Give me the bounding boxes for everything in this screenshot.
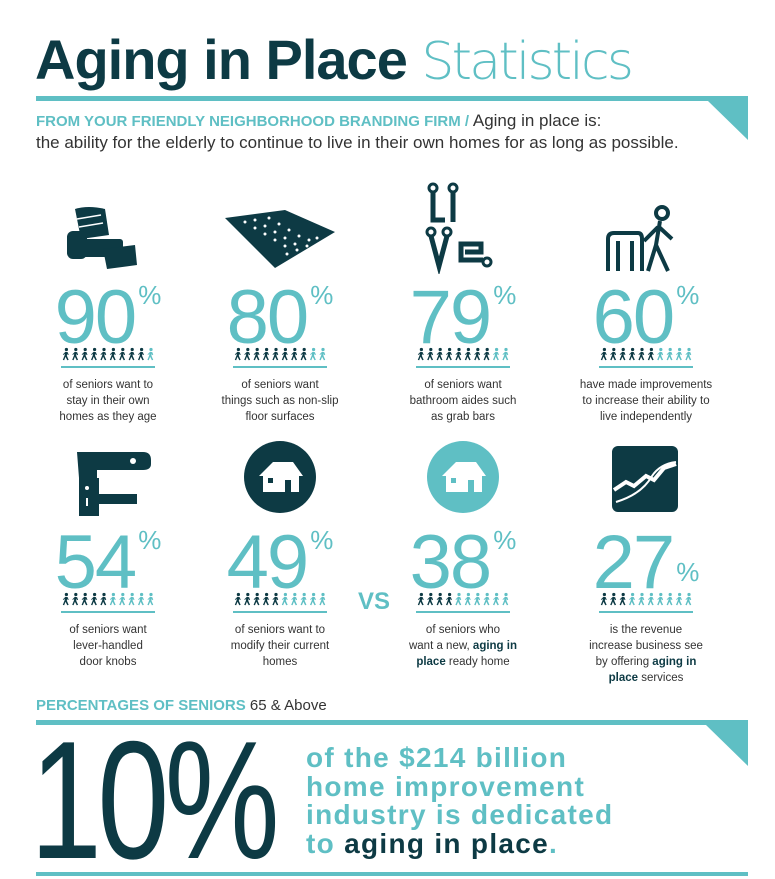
stat: 38%: 38%	[410, 520, 516, 605]
stat: 79%: of seniors want	[424, 379, 502, 391]
caption: stay in their own	[66, 395, 150, 407]
stat: 38%	[409, 441, 517, 668]
big stat text: home improvement	[306, 770, 585, 802]
stat: 80%: things such as non-slip	[222, 395, 338, 407]
icon: chart square	[612, 446, 678, 512]
icon: recliner	[67, 207, 137, 269]
subtitle: the ability for the elderly to continue to live in their own homes for as long as possible.	[36, 133, 679, 152]
text: lever-handled	[73, 640, 143, 652]
title: Aging in Place Statistics	[35, 28, 631, 92]
stat: 60%: 60%	[593, 275, 699, 360]
stat: 60%: have made improvements	[580, 379, 712, 391]
icon: LIVE	[426, 182, 492, 274]
icon: walker	[606, 205, 674, 272]
big stat text: industry is dedicated	[306, 799, 613, 830]
stat: 38%: want a new, aging in	[409, 640, 517, 652]
section heading: PERCENTAGES OF SENIORS 65 & Above	[36, 697, 327, 714]
caption: homes as they age	[59, 411, 157, 423]
stat: 27%: increase business see	[589, 640, 703, 652]
number: 90%	[55, 275, 161, 360]
stat: 90%	[55, 207, 161, 423]
stat: 60%	[580, 205, 712, 423]
icon: house dark circle	[244, 441, 316, 513]
stat: 38%: of seniors who	[426, 624, 500, 636]
stat: 49%: 49%	[227, 520, 333, 605]
stat: 27%: place services	[609, 672, 683, 684]
big stat text: to aging in place.	[306, 828, 558, 858]
text: homes	[263, 656, 297, 668]
icon: non-slip mat	[225, 210, 335, 268]
bottom rule	[36, 872, 748, 876]
stat: 79%	[410, 182, 516, 423]
icon: lever door knob	[77, 452, 151, 516]
text: door knobs	[80, 656, 136, 668]
stat: 60%: live independently	[600, 411, 692, 423]
people	[62, 348, 154, 360]
big stat text	[306, 742, 613, 859]
stat: 54%: 54%	[55, 520, 161, 605]
stat: 79%: as grab bars	[431, 411, 495, 423]
stat: 49%	[227, 441, 333, 668]
stat: 80%: of seniors want	[241, 379, 319, 391]
stat: 80%: floor surfaces	[245, 411, 315, 423]
stat: 54%	[55, 452, 161, 668]
text: place ready home	[416, 656, 510, 668]
stat: 54%: of seniors want	[69, 624, 147, 636]
caption	[59, 379, 157, 423]
stat: 27%: is the revenue	[610, 624, 682, 636]
subtitle	[36, 111, 679, 152]
vs label: VS	[358, 588, 390, 615]
section band	[36, 720, 748, 766]
stat: 80%	[222, 210, 338, 423]
stat: 27%: by offering aging in	[596, 656, 696, 668]
caption: of seniors want to	[63, 379, 153, 391]
stat: 49%: of seniors want to	[235, 624, 325, 636]
subtitle: FROM YOUR FRIENDLY NEIGHBORHOOD BRANDING FIRM / Aging in place is:	[36, 111, 601, 130]
stat: 80%: 80%	[227, 275, 333, 360]
big stat text: of the $214 billion	[306, 742, 567, 773]
stat: 27%	[589, 446, 703, 684]
stat: 60%: to increase their ability to	[582, 395, 710, 407]
icon: house teal circle	[427, 441, 499, 513]
header band	[36, 96, 748, 140]
stat: 79%: bathroom aides such	[410, 395, 516, 407]
stat: 27%: 27%	[593, 520, 699, 605]
stat: 79%: 79%	[410, 275, 516, 360]
text: modify their current	[231, 640, 329, 652]
